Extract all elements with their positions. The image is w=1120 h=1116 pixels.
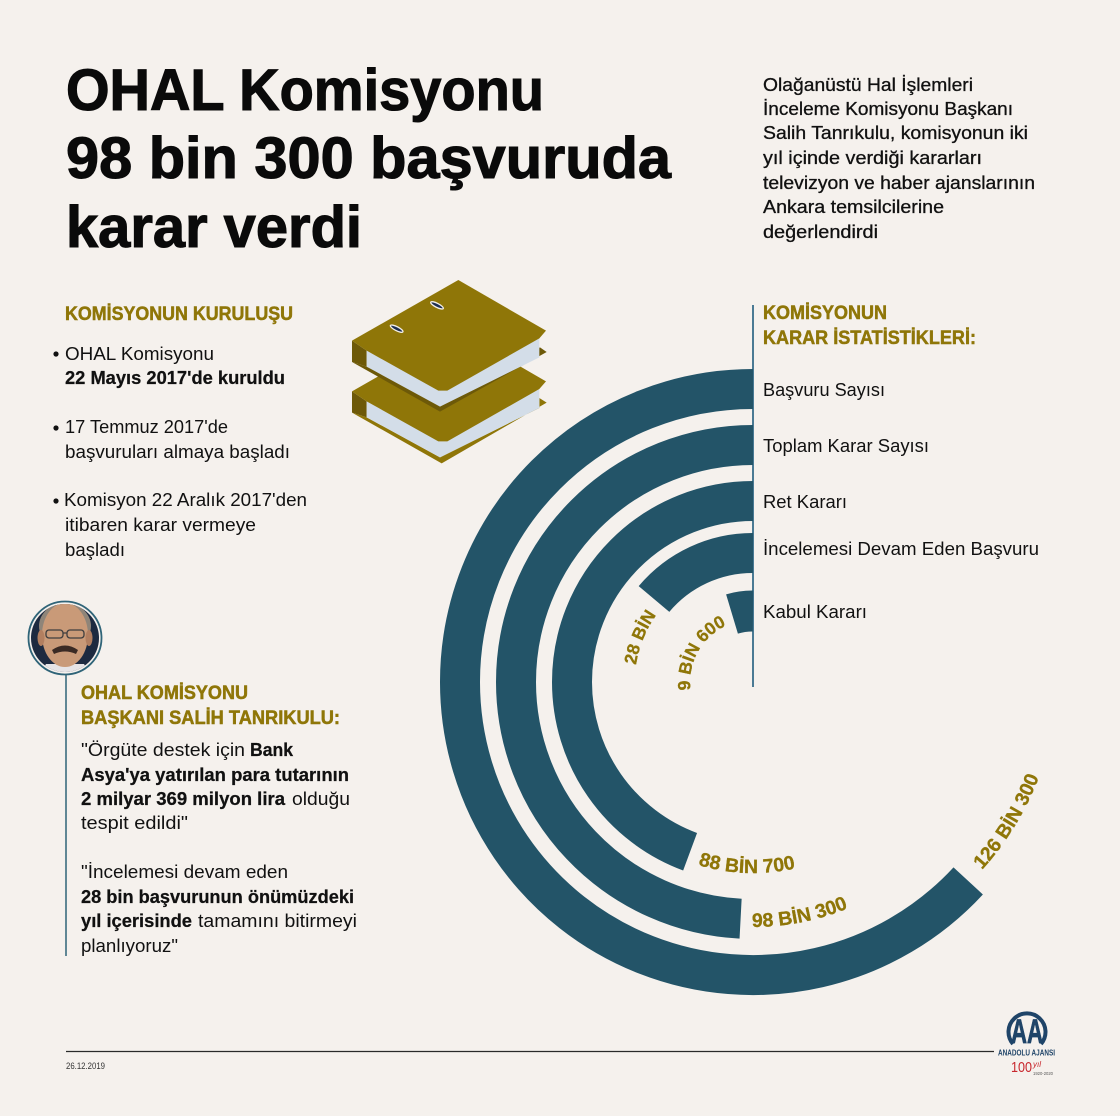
quote two: planlıyoruz" [81,936,178,956]
logo: Anadolu Ajansı: 1920-2020 [1033,1071,1053,1076]
quote one: olduğu [292,789,350,809]
bullet list: 22 Mayıs 2017'de kuruldu [65,368,285,388]
arc: Toplam Karar Sayısı 98 bin 300 [516,445,753,919]
value labels: 88 BİN 700 [699,852,794,874]
category labels: Ret Kararı [763,492,847,512]
value labels: 98 BİN 300 [752,897,846,928]
bullet list [53,344,307,560]
arc: Kabul Kararı 9 bin 600 [732,611,753,614]
arc: İncelemesi Devam Eden Başvuru 28 bin [654,553,753,599]
intro text: televizyon ve haber ajanslarının [763,173,1035,193]
bullet list: Komisyon 22 Aralık 2017'den [64,490,307,510]
heading: chairman: OHAL KOMİSYONU [81,683,248,704]
category labels: Toplam Karar Sayısı [763,436,929,456]
value labels: 126 BİN 300 [974,774,1038,870]
logo: Anadolu Ajansı: ANADOLU AJANSI [998,1048,1055,1058]
title: 98 bin 300 başvuruda [66,126,672,191]
category labels: Başvuru Sayısı [763,380,885,400]
value labels [624,609,1038,928]
intro text [763,75,1035,242]
value labels: 28 BİN [624,609,656,665]
title: karar verdi [66,195,362,260]
vertical line [65,674,67,956]
axis line [752,305,754,687]
bullet list: başladı [65,540,125,560]
category labels [763,380,1039,622]
intro text: Salih Tanrıkulu, komisyonun iki [763,123,1028,143]
logo: Anadolu Ajansı: yıl [1032,1060,1041,1069]
title [66,58,672,260]
intro text: Olağanüstü Hal İşlemleri [763,75,973,95]
arc: Başvuru Sayısı 126 bin 300 [460,389,968,975]
heading: chairman: BAŞKANI SALİH TANRIKULU: [81,708,340,729]
quote one: Asya'ya yatırılan para tutarının [81,765,349,785]
title: OHAL Komisyonu [66,58,544,123]
quote one: 2 milyar 369 milyon lira [81,789,286,809]
heading: statistics: KOMİSYONUN [763,303,887,324]
category labels: İncelemesi Devam Eden Başvuru [763,539,1039,559]
quote one: Bank [250,740,294,760]
heading: statistics [763,303,976,349]
bullet list: 17 Temmuz 2017'de [65,417,228,437]
category labels: Kabul Kararı [763,602,867,622]
logo: Anadolu Ajansı: 100 [1011,1059,1032,1076]
upper binder [352,280,547,412]
panel: decision statistics chart [440,302,1039,996]
bullet list: itibaren karar vermeye [65,515,256,535]
intro text: Ankara temsilcilerine [763,197,944,217]
quote one: "Örgüte destek için [81,740,245,760]
quote two: tamamını bitirmeyi [198,911,357,931]
intro text: İnceleme Komisyonu Başkanı [763,99,1013,119]
intro text: değerlendirdi [763,222,878,242]
logo: Anadolu Ajansı: AA [1011,1013,1043,1051]
portrait [28,602,102,680]
heading: founding: KOMİSYONUN KURULUŞU [65,304,293,325]
intro text: yıl içinde verdiği kararları [763,148,982,168]
panel: commission founding [53,304,307,560]
quote two: "İncelemesi devam eden [81,862,288,882]
heading: chairman [81,683,340,729]
bullet list: OHAL Komisyonu [65,344,214,364]
value labels: 9 BİN 600 [678,616,724,690]
quote two [81,862,357,956]
quote two: 28 bin başvurunun önümüzdeki [81,887,354,907]
footer line [66,1050,994,1052]
lower binder [352,331,547,463]
quote one: tespit edildi" [81,813,188,833]
bullet list: başvuruları almaya başladı [65,442,290,462]
panel: chairman quotes [28,602,357,956]
logo: Anadolu Ajansı [998,1013,1055,1076]
quote one [81,740,350,833]
arc: Ret Kararı 88 bin 700 [572,501,753,852]
quote two: yıl içerisinde [81,911,192,931]
heading: statistics: KARAR İSTATİSTİKLERİ: [763,328,976,349]
icon: binders [352,280,547,463]
date: 26.12.2019 [66,1061,105,1071]
binder rings [390,300,444,334]
